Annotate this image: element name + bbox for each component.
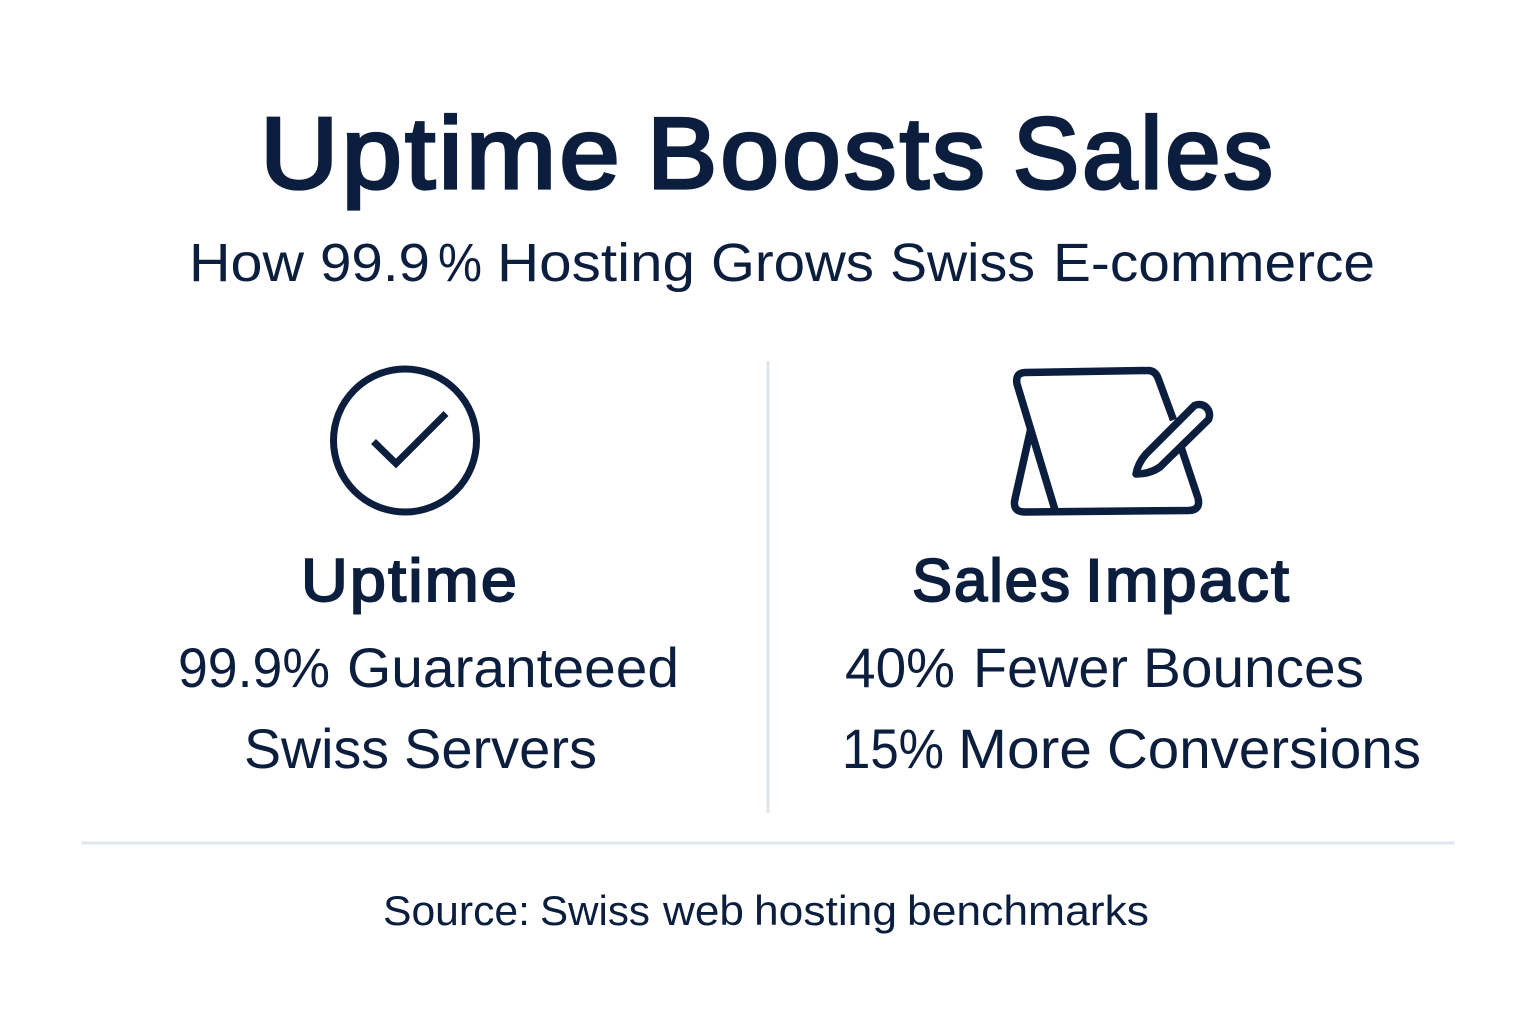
uptime heading: Uptime [301,547,519,614]
panel: sales impact [842,370,1421,780]
title [260,98,1276,210]
source note: Source: [383,887,530,934]
title: Uptime [260,98,623,210]
uptime guarantee text: 99.9% [178,636,330,699]
source note: benchmarks [907,887,1149,934]
bounces text: 40% [845,636,955,699]
source note: Swiss [540,887,650,934]
subtitle: Hosting [497,233,695,293]
subtitle [189,233,1375,293]
conversions text: 15% [842,717,944,780]
sales impact heading: Sales [912,547,1072,614]
swiss servers text: Servers [404,717,597,780]
sales impact heading: Impact [1085,547,1291,614]
conversions text: Conversions [1107,717,1421,780]
subtitle: Grows [711,233,874,293]
subtitle: E-commerce [1053,233,1375,293]
subtitle: % [438,233,482,293]
swiss servers text [244,717,597,780]
subtitle: Swiss [890,233,1035,293]
uptime guarantee text: Guaranteeed [347,636,679,699]
bounces text [845,636,1364,699]
title: Sales [1013,98,1276,210]
subtitle: How [189,233,305,293]
icon: check mark in circle [334,369,476,512]
conversions text [842,717,1421,780]
panel: uptime [178,369,679,780]
bounces text: Bounces [1143,636,1364,699]
icon: tablet with pen [1014,370,1210,512]
bounces text: Fewer [973,636,1128,699]
sales impact heading [912,547,1291,614]
source note [383,887,1149,934]
title: Boosts [647,98,988,210]
swiss servers text: Swiss [244,717,389,780]
conversions text: More [958,717,1092,780]
source note: hosting [754,887,897,934]
source note: web [662,887,744,934]
subtitle: 99.9 [320,233,430,293]
uptime guarantee text [178,636,679,699]
